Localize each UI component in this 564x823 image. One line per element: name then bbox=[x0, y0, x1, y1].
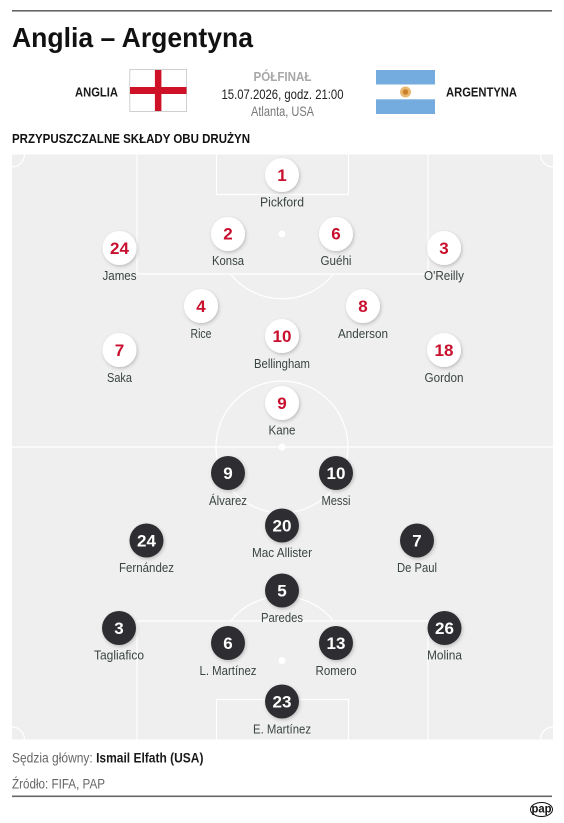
title: Anglia – Argentyna bbox=[12, 22, 253, 53]
player: Bellingham: 10 bbox=[273, 327, 291, 346]
player: O'Reilly: O'Reilly bbox=[424, 268, 464, 283]
player: Tagliafico: 3 bbox=[114, 619, 124, 638]
icon: flag of England bbox=[130, 70, 187, 112]
player: Pickford: 1 bbox=[277, 166, 287, 185]
player: James: 24 bbox=[110, 239, 129, 258]
player: Álvarez: Álvarez bbox=[209, 493, 247, 508]
player: Romero: Romero bbox=[316, 663, 356, 678]
player: Kane bbox=[265, 386, 299, 438]
player: O'Reilly bbox=[424, 231, 464, 283]
player: Molina bbox=[427, 611, 463, 662]
panel: football pitch bbox=[12, 154, 553, 740]
player: Álvarez bbox=[209, 456, 247, 508]
team label: Argentyna: ARGENTYNA bbox=[446, 84, 518, 100]
player: Tagliafico: Tagliafico bbox=[94, 648, 144, 662]
player: E. Martínez: 23 bbox=[273, 692, 291, 712]
player: De Paul: 7 bbox=[412, 532, 422, 550]
player: Rice bbox=[184, 289, 218, 341]
player: Gordon: 18 bbox=[435, 341, 453, 360]
player: Paredes: 5 bbox=[277, 582, 287, 600]
player: L. Martínez bbox=[200, 626, 256, 678]
team label: Anglia: ANGLIA bbox=[75, 84, 119, 100]
player: Messi: Messi bbox=[322, 493, 351, 508]
player: Pickford: Pickford bbox=[260, 194, 304, 210]
player: Saka: 7 bbox=[115, 341, 124, 360]
player: Fernández: Fernández bbox=[119, 560, 174, 575]
player: De Paul bbox=[397, 524, 437, 575]
player: E. Martínez bbox=[253, 684, 311, 736]
icon: flag of Argentina bbox=[376, 70, 435, 114]
player: Pickford bbox=[260, 158, 304, 210]
player: Fernández: 24 bbox=[137, 532, 156, 550]
player: Kane: Kane bbox=[268, 422, 296, 438]
player: Rice: Rice bbox=[190, 326, 212, 341]
player: Tagliafico bbox=[94, 611, 144, 662]
section heading: PRZYPUSZCZALNE SKŁADY OBU DRUŻYN bbox=[12, 131, 250, 146]
player: L. Martínez: L. Martínez bbox=[200, 663, 256, 678]
player: Mac Allister: 20 bbox=[273, 516, 291, 536]
player: Konsa: Konsa bbox=[212, 253, 245, 268]
player: Anderson: 8 bbox=[358, 297, 368, 316]
player: Anderson bbox=[338, 289, 388, 341]
player: L. Martínez: 6 bbox=[223, 634, 233, 653]
player: Bellingham: Bellingham bbox=[254, 356, 310, 371]
player: Álvarez: 9 bbox=[223, 464, 233, 483]
player: Anderson: Anderson bbox=[338, 326, 388, 341]
player: Gordon bbox=[424, 333, 464, 385]
player: Romero bbox=[316, 626, 356, 678]
icon: PAP logo: pap bbox=[532, 802, 552, 816]
player: Gordon: Gordon bbox=[424, 370, 464, 385]
player: Paredes bbox=[261, 574, 303, 625]
player: Saka: Saka bbox=[107, 370, 133, 385]
player: James: James bbox=[102, 268, 137, 283]
player: Kane: 9 bbox=[277, 394, 287, 413]
player: Mac Allister: Mac Allister bbox=[252, 545, 313, 560]
player: Romero: 13 bbox=[327, 634, 345, 653]
match info bbox=[222, 69, 344, 119]
player: Saka bbox=[102, 333, 136, 385]
player: Paredes: Paredes bbox=[261, 610, 303, 625]
match info: Atlanta, USA bbox=[251, 103, 315, 119]
player: Molina: Molina bbox=[427, 648, 463, 662]
player: De Paul: De Paul bbox=[397, 560, 437, 575]
player: E. Martínez: E. Martínez bbox=[253, 722, 311, 736]
player: O'Reilly: 3 bbox=[439, 239, 449, 258]
player: Fernández bbox=[119, 524, 174, 575]
player: Guéhi: Guéhi bbox=[320, 253, 352, 268]
player: Messi bbox=[319, 456, 353, 508]
player: Guéhi: 6 bbox=[331, 224, 341, 244]
player: Guéhi bbox=[319, 217, 353, 268]
player: Messi: 10 bbox=[327, 464, 345, 483]
player: Konsa bbox=[211, 217, 245, 268]
referee line: Sędzia główny: Ismail Elfath (USA) bbox=[12, 750, 204, 766]
player: Molina: 26 bbox=[435, 619, 454, 638]
match info: PÓŁFINAŁ bbox=[254, 69, 312, 84]
player: James bbox=[102, 231, 137, 283]
player: Bellingham bbox=[254, 319, 310, 371]
player: Mac Allister bbox=[252, 508, 313, 560]
player: Rice: 4 bbox=[196, 297, 206, 316]
player: Konsa: 2 bbox=[223, 224, 233, 244]
source line: Źródło: FIFA, PAP bbox=[12, 776, 105, 792]
match info: 15.07.2026, godz. 21:00 bbox=[222, 86, 344, 102]
